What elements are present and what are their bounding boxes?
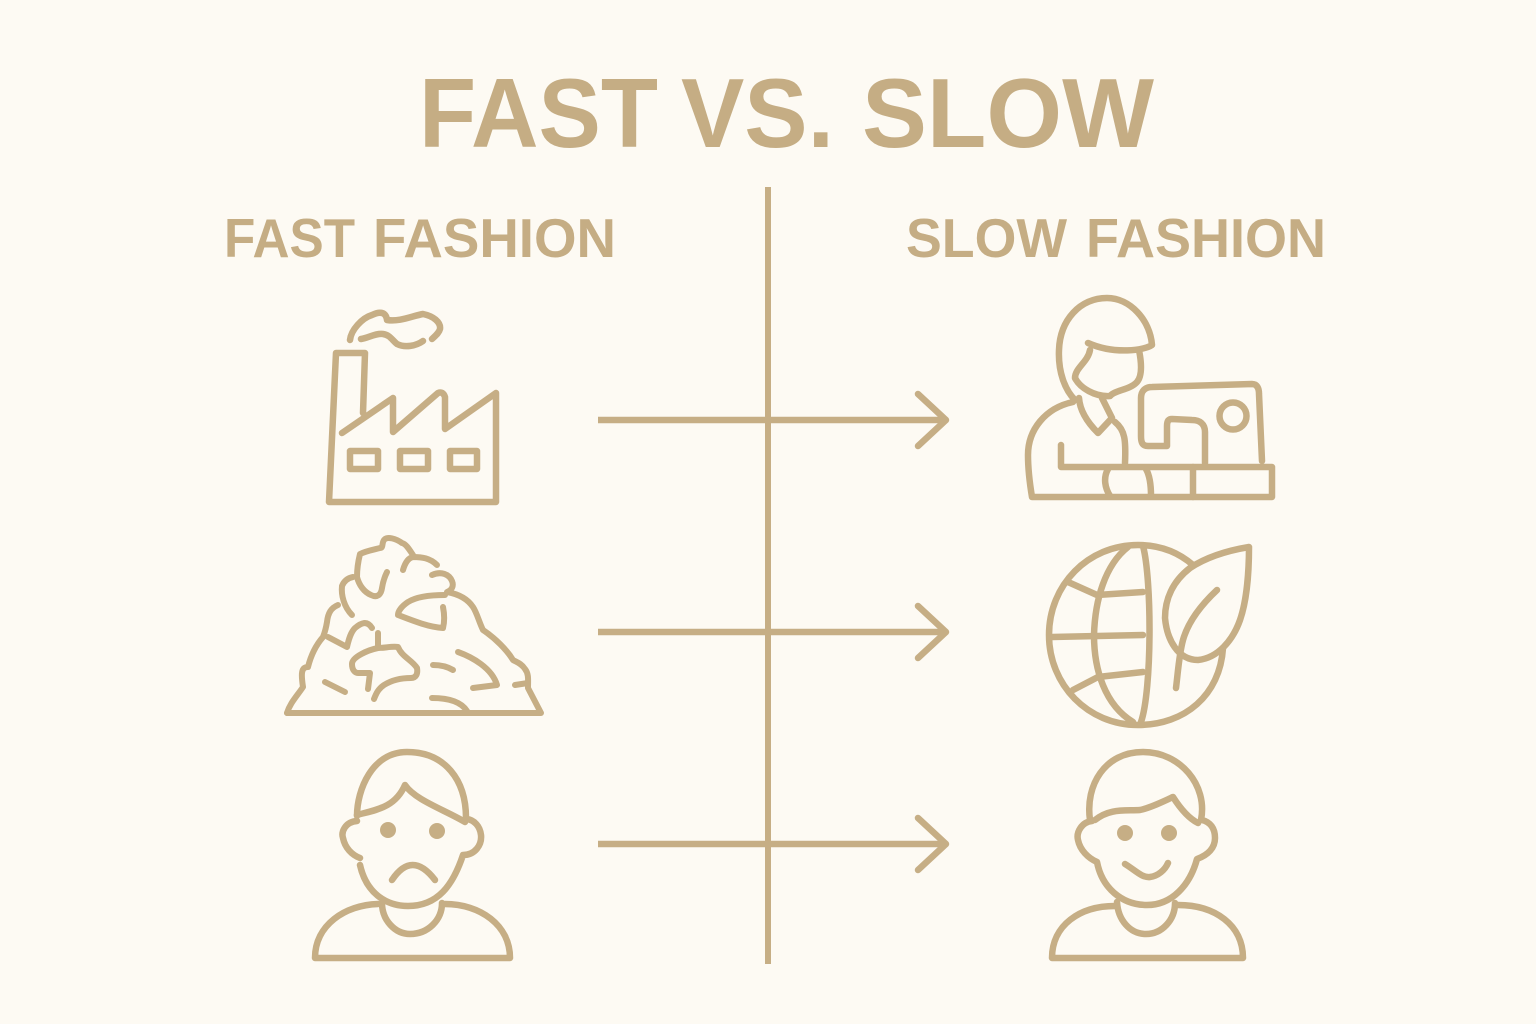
seamstress body [1028,402,1272,497]
heading: fast fashion [224,207,616,269]
happy mouth [1125,863,1168,877]
icon: globe and leaf [1049,545,1249,725]
arrow: people [598,818,946,870]
icon: sad person [315,752,510,958]
icon: factory [329,313,496,502]
happy fringe [1095,797,1198,823]
table details [1105,467,1193,497]
globe meridians [1094,546,1150,722]
seamstress face [1075,350,1141,396]
factory building [329,353,496,502]
globe outline [1049,545,1223,725]
sad shoulders [315,904,510,958]
happy shoulders [1052,905,1243,958]
happy eyes [1117,825,1177,841]
sad eyes [380,822,445,839]
happy hair [1089,752,1202,820]
sad fringe [357,785,465,822]
sad mouth [392,865,435,880]
arrow: production [598,394,946,446]
factory smoke [350,313,440,346]
sad neck [382,903,442,934]
machine wheel [1220,402,1246,430]
title [419,58,1154,168]
heading: fast fashion: FAST [224,207,355,269]
heading: slow fashion: SLOW [906,207,1067,269]
title: FAST [419,58,658,168]
sad head [343,819,481,906]
title: VS. [681,58,834,168]
sad hair [357,752,466,818]
happy head [1078,820,1215,905]
leaf stem [1176,590,1217,688]
seamstress hair [1059,298,1152,400]
leaf [1165,547,1249,660]
icon: clothing waste pile [287,538,541,713]
globe latitudes [1052,582,1143,690]
heading: slow fashion: FASHION [1086,207,1326,269]
seamstress collar [1079,398,1112,433]
icon: happy person [1052,752,1243,958]
heading: slow fashion [906,207,1326,269]
arrow: waste [598,606,946,658]
title: SLOW [862,58,1154,168]
center divider [765,187,771,964]
heading: fast fashion: FASHION [373,207,616,269]
icon: seamstress at sewing machine [1028,298,1272,497]
sewing machine [1141,384,1262,463]
happy neck [1117,902,1175,934]
factory windows [350,451,477,469]
